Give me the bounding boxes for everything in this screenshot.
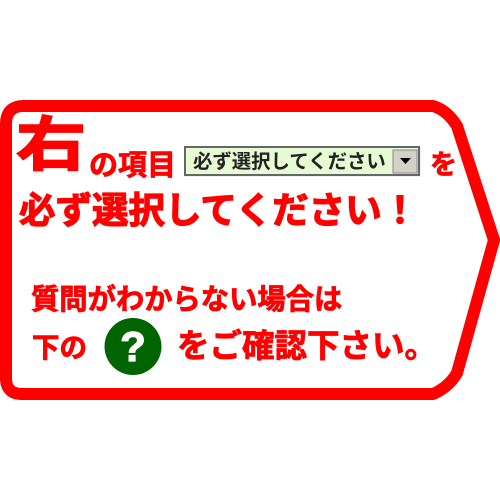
- dropdown arrow button: [393, 150, 417, 173]
- dropdown label: 必ず選択してください: [193, 151, 386, 173]
- dropdown: sample select control: [184, 146, 421, 177]
- text: particle after dropdown: を: [430, 150, 457, 180]
- heading: must select line: 必ず選択してください！: [19, 190, 418, 231]
- text: if you do not understand the question: 質問がわからない場合は: [31, 283, 342, 315]
- icon: green question mark circle: [104, 318, 162, 375]
- panel: red arrow-shaped callout outline: [6, 106, 494, 394]
- heading: large character: 右: [16, 111, 86, 178]
- heading: text before dropdown: の項目: [89, 150, 176, 182]
- text: please confirm: をご確認下さい。: [177, 328, 437, 364]
- text: below the: 下の: [32, 332, 87, 363]
- icon: green question mark circle: ?: [120, 323, 146, 370]
